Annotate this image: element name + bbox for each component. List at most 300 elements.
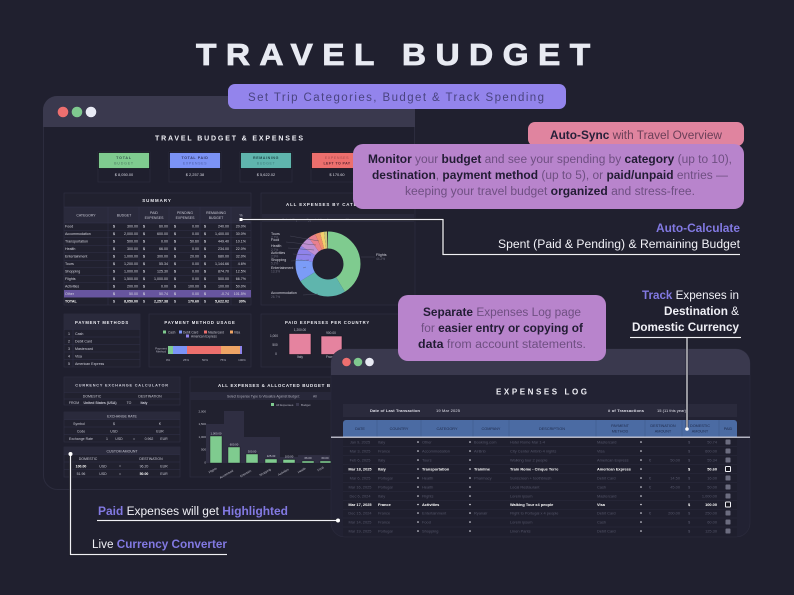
panel: currency exchange calculator: Italy [140, 401, 148, 405]
window title bar [43, 96, 415, 127]
panel: all expenses by category donut: 5.2% [271, 262, 278, 266]
panel: summary table: Other [65, 292, 75, 296]
callout: separate expenses log: for easier entry or copying of [421, 323, 583, 335]
log summary row [343, 404, 737, 417]
dim log entries: 14.50 [670, 476, 681, 480]
dim log entries: 55.34 [707, 458, 718, 462]
KPI card: remaining budget [240, 152, 292, 182]
panel: summary table: $ [143, 254, 145, 258]
panel: payment methods list: 4 [68, 354, 70, 358]
dim log entries: 60.00 [707, 520, 718, 524]
panel: summary table: $ [204, 300, 206, 304]
panel: payment method usage chart: Mastercard [208, 330, 224, 334]
panel: payment method usage chart: 100% [238, 358, 246, 362]
panel: summary table: SUMMARY [142, 198, 172, 203]
log summary row: 15 (11 this year) [657, 408, 687, 413]
dim log entries: Walking tour 2 people [510, 458, 548, 462]
KPI card: remaining budget: REMAINING [253, 156, 279, 160]
panel: summary table: Transportation [65, 240, 88, 244]
panel: paid expenses per country chart: 1,200.00 [294, 328, 306, 332]
panel: summary table: 55.34 [159, 262, 168, 266]
dim log entries: $ [688, 484, 691, 490]
panel: summary table: 8,050.00 [124, 300, 138, 304]
dim log entries: Mastercard [597, 440, 616, 444]
panel: summary table: 0.00 [161, 240, 168, 244]
panel: summary table: $ [174, 232, 176, 236]
panel: expenses log window [331, 349, 750, 537]
panel: summary table: $ [174, 300, 176, 304]
panel: summary table: 50.00 [129, 292, 138, 296]
panel: all expenses and allocated budget chart: Budget [301, 403, 311, 407]
custom amount block: EUR [160, 464, 168, 468]
custom amount block: DESTINATION [139, 457, 163, 461]
dim log entries: Pharmacy [474, 476, 492, 480]
exchange rate block: EUR [156, 430, 164, 434]
panel: summary table: REMAINING [206, 211, 226, 215]
donut chart [304, 240, 352, 288]
log title bar [331, 349, 750, 375]
dim log entries: Health [422, 476, 433, 480]
panel: summary table: 5,622.02 [215, 300, 229, 304]
custom amount block: DOMESTIC [79, 457, 98, 461]
dim log entries: Shopping [422, 528, 438, 534]
text: track expenses: Destination & [664, 306, 739, 318]
panel: summary table: 240.00 [218, 224, 229, 228]
exchange rate block: $ [113, 422, 115, 426]
dim log entries: Local Restaurant [510, 484, 540, 490]
panel: summary table: $ [113, 232, 115, 236]
log table header: COMPANY [482, 427, 501, 431]
panel: summary table: $ [143, 284, 145, 288]
panel: summary table: 449.40 [218, 240, 229, 244]
callout: separate expenses log: data from account statements. [418, 339, 586, 351]
text: track expenses: Domestic Currency [632, 322, 740, 334]
panel: payment methods list: 3 [68, 347, 70, 351]
paid checkboxes [726, 440, 730, 534]
dim log entries: Debit Card [597, 510, 616, 516]
custom amount block: USD [99, 472, 107, 476]
dim log entries: Dec 15, 2024 [348, 510, 372, 516]
callout: separate expenses log: Separate Expenses Log page [423, 307, 581, 319]
dim log entries: Tours [422, 458, 432, 462]
panel: summary table: $ [113, 292, 115, 296]
highlighted log entries: $ [688, 466, 691, 472]
panel: all expenses by category donut [261, 193, 415, 305]
KPI card: expenses left to pay: EXPENSES [325, 156, 349, 160]
donut labels: Food [271, 238, 279, 242]
highlighted log entries: Mar 18, 2025 [348, 466, 372, 472]
panel: summary table: 50.0% [236, 284, 247, 288]
panel: summary table: $ [113, 240, 115, 244]
custom amount block: 50.00 [140, 472, 148, 476]
panel: payment methods list: 2 [68, 340, 70, 344]
dim log entries: AirBnb [474, 448, 486, 454]
panel: summary table: 0.00 [161, 284, 168, 288]
panel: payment methods list: 1 [68, 332, 70, 336]
panel: summary table: 0.00 [192, 247, 199, 251]
subtitle pill: Set Trip Categories, Budget & Track Spending [248, 92, 544, 104]
panel: all expenses and allocated budget chart: Select Expense Type to Visualize Against Budget: [227, 394, 300, 398]
panel: all expenses and allocated budget chart: 66.00 [304, 456, 312, 460]
highlighted log entries: Train Rome - Cinque Terre [510, 466, 559, 472]
panel: payment method usage chart: 0% [166, 358, 170, 362]
panel: payment methods list: Mastercard [75, 347, 93, 351]
dim log entries: Linen Pants [510, 528, 531, 534]
log table header: DATE [355, 427, 365, 431]
panel: summary table: 1,400.00 [215, 232, 229, 236]
panel: summary table: 0.00 [192, 262, 199, 266]
panel: summary table: $ [143, 240, 145, 244]
custom amount block: = [119, 472, 121, 476]
dim log entries [348, 440, 718, 534]
panel: payment method usage chart: Cash [168, 330, 176, 334]
log table rows [343, 438, 737, 536]
dim log entries: Cash [597, 520, 606, 524]
KPI card: total paid expenses: $ 2,257.38 [186, 172, 204, 177]
panel: summary table: $ [143, 270, 145, 274]
panel: paid expenses per country chart: Italy [297, 355, 303, 359]
panel: all expenses and allocated budget chart: Activities [277, 467, 290, 477]
dim log entries: Dec 6, 2024 [350, 494, 371, 498]
panel: paid expenses per country chart: 0 [275, 352, 277, 356]
log traffic lights [342, 358, 374, 366]
panel: payment method usage chart: Debit Card [183, 330, 198, 334]
panel: summary table: 874.70 [218, 270, 229, 274]
expense bars [210, 436, 331, 463]
highlighted log entries: $ [688, 502, 691, 507]
panel: summary table: PENDING [177, 211, 193, 215]
callout: separate expenses log [398, 295, 606, 361]
dim log entries: Italy [378, 458, 385, 462]
highlighted log entries: France [378, 502, 392, 507]
panel: summary table: $ [143, 300, 145, 304]
panel: all expenses and allocated budget chart [190, 377, 366, 480]
panel: all expenses and allocated budget chart: 125.30 [267, 454, 276, 458]
panel: summary table: 600.00 [157, 232, 168, 236]
panel: summary table: $ [204, 284, 206, 288]
dim log entries: Mar 19, 2025 [349, 528, 371, 534]
panel: summary table: 10.1% [236, 240, 247, 244]
highlighted log entries: Walking Tour x4 people [510, 502, 554, 507]
log table header: PAYMENT [611, 424, 630, 428]
dim log entries: 45.00 [670, 484, 681, 490]
panel: all expenses and allocated budget chart: All Expenses [276, 403, 294, 407]
dim log entries: Ryanair [474, 510, 488, 516]
panel: all expenses by category donut: 44.2% [376, 257, 385, 261]
panel: summary table: $ [174, 240, 176, 244]
panel: all expenses and allocated budget chart: 2,000 [198, 410, 206, 414]
dim log entries: 50.00 [707, 484, 718, 490]
panel: summary table: $ [113, 277, 115, 281]
panel: payment methods list [64, 314, 140, 367]
panel: summary table: $ [143, 277, 145, 281]
panel: summary table: % [239, 214, 243, 218]
panel: summary table: 1,144.66 [215, 262, 229, 266]
arrow: currency converter line [68, 452, 227, 554]
dim log entries: $ [688, 510, 691, 516]
highlighted Other row [64, 290, 251, 297]
dashboard heading: TRAVEL BUDGET & EXPENSES [155, 136, 303, 142]
dim log entries: 125.30 [705, 528, 718, 534]
panel: summary table: 1,200.00 [124, 262, 138, 266]
dim log entries: $ [688, 448, 691, 454]
KPI card: total budget: $ 8,050.00 [115, 172, 134, 177]
exchange rate block: Exchange Rate [69, 437, 93, 441]
exchange rate block: = [133, 437, 135, 441]
highlighted log entries: Trainline [474, 466, 491, 472]
panel: summary table: $ [204, 240, 206, 244]
window traffic lights [58, 107, 96, 117]
panel: summary table: EXPENSES [145, 216, 164, 220]
panel: all expenses and allocated budget chart: 60.00 [322, 456, 329, 460]
dim log entries: $ [688, 520, 691, 524]
dim log entries: Mar 6, 2025 [350, 476, 370, 480]
panel: all expenses and allocated budget chart: 1,500 [198, 422, 206, 426]
panel: payment method usage chart: Visa [234, 330, 240, 334]
dim log entries: 600.00 [705, 448, 718, 454]
text: paid expenses highlighted: Paid Expenses will get Highlighted [98, 506, 288, 518]
exchange rate block: USD [110, 430, 118, 434]
dim log entries: Flight to Portugal x 4 people [510, 510, 558, 516]
arrow: track expenses to domestic amount [630, 338, 741, 431]
dim log entries: Portugal [378, 484, 393, 490]
panel: currency exchange calculator: CURRENCY EXCHANGE CALCULATOR [75, 384, 169, 388]
donut labels: Activities [271, 251, 285, 255]
dim log entries: Entertainment [422, 510, 447, 516]
panel: summary table: PAID [150, 211, 158, 215]
panel: all expenses and allocated budget chart: All [313, 394, 317, 398]
panel: all expenses by category donut: Select Expense Type to Visualize [282, 218, 332, 222]
panel: payment method usage chart: 25% [183, 358, 189, 362]
panel: payment method usage chart: 75% [220, 358, 226, 362]
panel: summary table: 680.00 [218, 254, 229, 258]
panel: paid expenses per country chart: 900.00 [326, 331, 336, 335]
panel: summary table: 0.00 [192, 277, 199, 281]
dim log entries: Hotel Rome Mar 1-4 [510, 440, 546, 444]
log table header: DOMESTIC [690, 424, 710, 428]
panel: summary table: 234.00 [218, 247, 229, 251]
title: TRAVEL BUDGET [196, 37, 591, 72]
panel: summary table: 12.5% [236, 270, 247, 274]
panel: payment method usage chart: Payment [155, 346, 167, 350]
highlighted log entries: 100.00 [705, 502, 717, 507]
panel: all expenses and allocated budget chart: 0 [204, 460, 206, 464]
callout: monitor budget: destination, payment method (up to 5), or paid/unpaid entries — [372, 170, 729, 182]
panel: summary table: 32.0% [236, 254, 247, 258]
text: auto-calculate [498, 223, 741, 251]
dim log entries: Flights [422, 494, 434, 498]
stacked bar [168, 346, 242, 354]
panel: paid expenses per country chart [261, 314, 415, 367]
custom amount block: 51.96 [77, 472, 85, 476]
budget step bars [206, 411, 330, 463]
dim log entries: Lorem ipsum [510, 520, 532, 524]
panel: payment method usage chart: PAYMENT METHOD USAGE [164, 320, 236, 325]
callout: monitor budget [353, 144, 744, 209]
dim log entries: Food [422, 520, 431, 524]
panel: summary table: 101.5% [234, 292, 247, 296]
log table header: METHOD [612, 430, 628, 434]
dim log entries: Booking.com [474, 440, 496, 444]
panel: summary table: $ [174, 277, 176, 281]
panel: summary table: $ [113, 224, 115, 228]
exchange rate block: € [159, 422, 161, 426]
log table header: CATEGORY [437, 427, 458, 431]
KPI card: total paid expenses [169, 152, 221, 182]
panel: all expenses and allocated budget chart: 1,000.00 [211, 432, 222, 436]
panel: summary table: $ [143, 262, 145, 266]
panel: summary table: $ [174, 284, 176, 288]
log summary row: Date of Last Transaction [370, 408, 421, 413]
panel: currency exchange calculator: DESTINATION [138, 394, 162, 398]
panel: summary table: -0.74 [221, 292, 229, 296]
dim log entries: 250.00 [705, 510, 718, 516]
donut labels: Flights [376, 253, 387, 257]
panel: summary table: 125.30 [157, 270, 168, 274]
arrow: paid expenses line [97, 518, 340, 522]
callout: auto-sync [528, 122, 744, 146]
panel: currency exchange calculator [64, 377, 180, 477]
callout: auto-sync: Auto-Sync with Travel Overview [550, 130, 723, 142]
panel: summary table: Activities [65, 284, 79, 288]
exchange rate block [64, 412, 180, 442]
panel: summary table: 60.00 [159, 224, 168, 228]
panel: all expenses by category donut: 2.7% [271, 236, 278, 240]
dim log entries: Lorem ipsum [510, 494, 532, 498]
exchange rate block: 1 [106, 437, 108, 441]
panel: summary table: 0.00 [192, 270, 199, 274]
panel: summary table: 2,257.38 [154, 300, 168, 304]
panel: summary table: 50.60 [190, 240, 199, 244]
panel: summary table: 22.0% [236, 247, 247, 251]
panel: all expenses and allocated budget chart: 100.00 [285, 454, 294, 458]
panel: summary table: 2,000.00 [124, 232, 138, 236]
text: track expenses: Track Expenses in [642, 290, 739, 302]
panel: payment methods list: 5 [68, 362, 70, 366]
exchange rate block: USD [115, 437, 123, 441]
panel: paid expenses per country chart: PAID EXPENSES PER COUNTRY [285, 320, 370, 325]
log table header: DESCRIPTION [539, 427, 565, 431]
dim log entries: Mastercard [597, 494, 616, 498]
dim log entries: Debit Card [597, 528, 616, 534]
panel: all expenses by category donut: 13.3% [271, 270, 280, 274]
panel: summary table: $ [113, 270, 115, 274]
callout: monitor budget: Monitor your budget and see your spending by category (up to 10), [368, 154, 732, 166]
highlighted log entries [348, 466, 717, 507]
KPI card: total budget: BUDGET [114, 162, 134, 166]
KPI card: total paid expenses: TOTAL PAID [182, 156, 208, 160]
panel: summary table: 1,000.00 [154, 277, 168, 281]
panel: summary table [64, 193, 251, 305]
panel: paid expenses per country chart: 1,000 [270, 334, 278, 338]
custom amount block: CUSTOM AMOUNT [106, 450, 138, 454]
dim log entries: Debit Card [597, 476, 616, 480]
donut labels: Tours [271, 232, 280, 236]
panel: summary table: BUDGET [209, 216, 224, 220]
panel: summary table: $ [174, 224, 176, 228]
panel: summary table: $ [143, 224, 145, 228]
panel: summary table: 100.00 [218, 284, 229, 288]
panel: payment methods list: Debit Card [75, 340, 92, 344]
panel: all expenses and allocated budget chart: ALL EXPENSES & ALLOCATED BUDGET BY CATEGORY [218, 383, 366, 388]
dim log entries: France [378, 520, 390, 524]
panel: summary table: $ [204, 277, 206, 281]
highlighted log entries: Mar 17, 2025 [348, 502, 372, 507]
dim log entries: Mar 16, 2025 [349, 484, 371, 490]
exchange rate block: Symbol [73, 422, 85, 426]
panel: summary table: 30% [239, 300, 247, 304]
panel: all expenses by category donut: 2.9% [271, 254, 278, 258]
donut labels: Health [271, 244, 281, 248]
KPI card: expenses left to pay: LEFT TO PAY [323, 162, 351, 166]
dim log entries: Health [422, 484, 433, 490]
text: auto-calculate: Spent (Paid & Pending) & Remaining Budget [498, 239, 741, 251]
exchange rate block: Code [77, 430, 85, 434]
dim log entries: Jan 9, 2025 [350, 440, 370, 444]
panel: summary table: $ [113, 247, 115, 251]
panel: all expenses and allocated budget chart: Health [297, 466, 307, 474]
dim log entries: 16.00 [707, 476, 718, 480]
panel: summary table: $ [174, 292, 176, 296]
panel: summary table: 300.00 [157, 254, 168, 258]
panel: all expenses and allocated budget chart: Shopping [259, 467, 272, 477]
text: auto-calculate: Auto-Calculate [656, 223, 740, 235]
custom amount block: 100.00 [76, 464, 86, 468]
custom amount block: = [119, 464, 121, 468]
dim log entries: € [649, 476, 652, 480]
panel: summary table: $ [204, 232, 206, 236]
panel: currency exchange calculator: DOMESTIC [83, 394, 102, 398]
panel: summary table: Shopping [65, 270, 80, 274]
panel: summary table: 500.00 [218, 277, 229, 281]
panel: summary table: EXPENSES [176, 216, 195, 220]
dim log entries: Sunscreen + toothbrush [510, 476, 551, 480]
panel: all expenses and allocated budget chart: 300.00 [248, 450, 257, 454]
KPI card: remaining budget: $ 5,622.02 [257, 172, 275, 177]
panel: summary table: $ [174, 254, 176, 258]
dim log entries: € [649, 458, 652, 462]
panel: summary table: 100.00 [188, 284, 199, 288]
panel: summary table: 0.00 [192, 224, 199, 228]
panel: currency exchange calculator: TO [127, 401, 132, 405]
panel: payment methods list: American Express [75, 362, 104, 366]
log table header: AMOUNT [655, 430, 672, 434]
panel: summary table: Accommodation [65, 232, 91, 236]
panel: summary table: $ [204, 224, 206, 228]
panel: all expenses by category donut: 26.7% [271, 295, 280, 299]
panel: budget dashboard window [43, 96, 415, 490]
dim log entries: Visa [597, 448, 605, 454]
log heading: EXPENSES LOG [496, 388, 587, 396]
highlighted log entries: Italy [378, 466, 387, 472]
dim log entries: 50.00 [670, 458, 681, 462]
dim log entries: Mar 3, 2025 [350, 448, 370, 454]
panel: summary table: $ [204, 254, 206, 258]
panel: summary table: $ [143, 232, 145, 236]
highlighted log entries: Visa [597, 502, 606, 507]
donut labels [271, 232, 387, 295]
panel: summary table: 500.00 [127, 240, 138, 244]
panel: all expenses and allocated budget chart: Flights [208, 466, 218, 474]
KPI card: total budget: TOTAL [116, 156, 132, 160]
panel: summary table: Flights [65, 277, 76, 281]
panel: paid expenses per country chart: France [326, 355, 336, 359]
dim log entries: 50.74 [707, 440, 718, 444]
panel: currency exchange calculator: FROM [69, 401, 79, 405]
panel: summary table: 66.7% [236, 277, 247, 281]
dim log entries: Mar 14, 2025 [349, 520, 371, 524]
panel: summary table: TOTAL [65, 300, 77, 304]
